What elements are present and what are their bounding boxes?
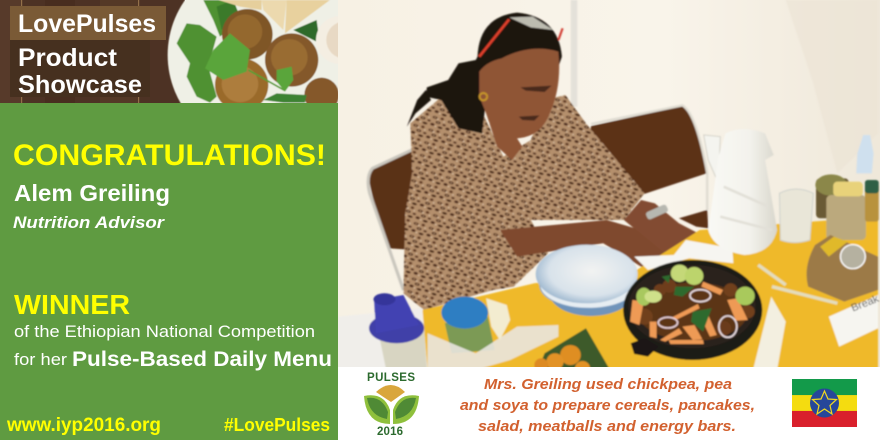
white table end bbox=[338, 308, 428, 370]
lunch card bbox=[753, 297, 786, 370]
jar with blue lid bbox=[441, 297, 495, 353]
thermos bbox=[704, 129, 777, 255]
caption text bbox=[460, 376, 755, 435]
breakfast card: Break bbox=[849, 293, 880, 314]
panel: green text panel bbox=[0, 103, 338, 440]
daily menu line: for her bbox=[14, 350, 67, 369]
right chair bbox=[579, 105, 708, 228]
left chair bbox=[368, 149, 414, 290]
header subtitle line 1: Product bbox=[18, 44, 118, 72]
white bowl bbox=[486, 298, 510, 340]
header title: LovePulses bbox=[18, 10, 156, 38]
food photo: falafel plate bbox=[166, 0, 338, 103]
wall shadow bbox=[786, 0, 878, 173]
leaf dish with fritters bbox=[534, 328, 610, 367]
plastic bag bbox=[428, 325, 558, 370]
icon: Ethiopian flag bbox=[792, 379, 857, 427]
panel: photo of the winner at her table bbox=[338, 0, 880, 376]
sunglasses bbox=[479, 19, 509, 57]
caption text: and soya to prepare cereals, pancakes, bbox=[460, 397, 755, 414]
blue shaker bottle bbox=[369, 293, 427, 370]
wheat stalks bbox=[758, 265, 837, 303]
hashtag: #LovePulses bbox=[224, 415, 330, 435]
logo: pulses 2016: 2016 bbox=[377, 426, 403, 438]
wood background bbox=[0, 0, 185, 103]
water bottle bbox=[856, 135, 874, 173]
caption text: Mrs. Greiling used chickpea, pea bbox=[484, 376, 732, 393]
panel: product showcase header bbox=[0, 0, 338, 103]
daily menu bold: Pulse-Based Daily Menu bbox=[72, 348, 332, 371]
competition line: of the Ethiopian National Competition bbox=[14, 322, 315, 341]
caption text: salad, meatballs and energy bars. bbox=[478, 418, 736, 435]
napkin bbox=[634, 240, 733, 270]
hair bbox=[426, 13, 562, 133]
header subtitle line 2: Showcase bbox=[18, 71, 142, 99]
table bbox=[422, 217, 878, 370]
jars bbox=[815, 174, 879, 240]
grain packet bbox=[807, 235, 878, 302]
logo: pulses 2016: PULSES bbox=[367, 372, 415, 384]
logo: pulses 2016 bbox=[364, 372, 419, 438]
head and neck bbox=[479, 49, 559, 160]
heading: congratulations: CONGRATULATIONS! bbox=[13, 139, 326, 172]
arms bbox=[500, 220, 665, 267]
website: www.iyp2016.org bbox=[6, 415, 161, 436]
heading: winner: WINNER bbox=[14, 289, 130, 320]
winner role: Nutrition Advisor bbox=[13, 213, 166, 232]
panel: bottom caption strip bbox=[338, 367, 880, 440]
breakfast card bbox=[829, 293, 880, 347]
torso in leopard blouse bbox=[403, 95, 645, 310]
stacked plates bbox=[536, 245, 638, 316]
glass bbox=[780, 189, 813, 242]
frying pan with food bbox=[623, 260, 762, 360]
winner name: Alem Greiling bbox=[14, 180, 170, 206]
tent pole bbox=[571, 0, 577, 107]
